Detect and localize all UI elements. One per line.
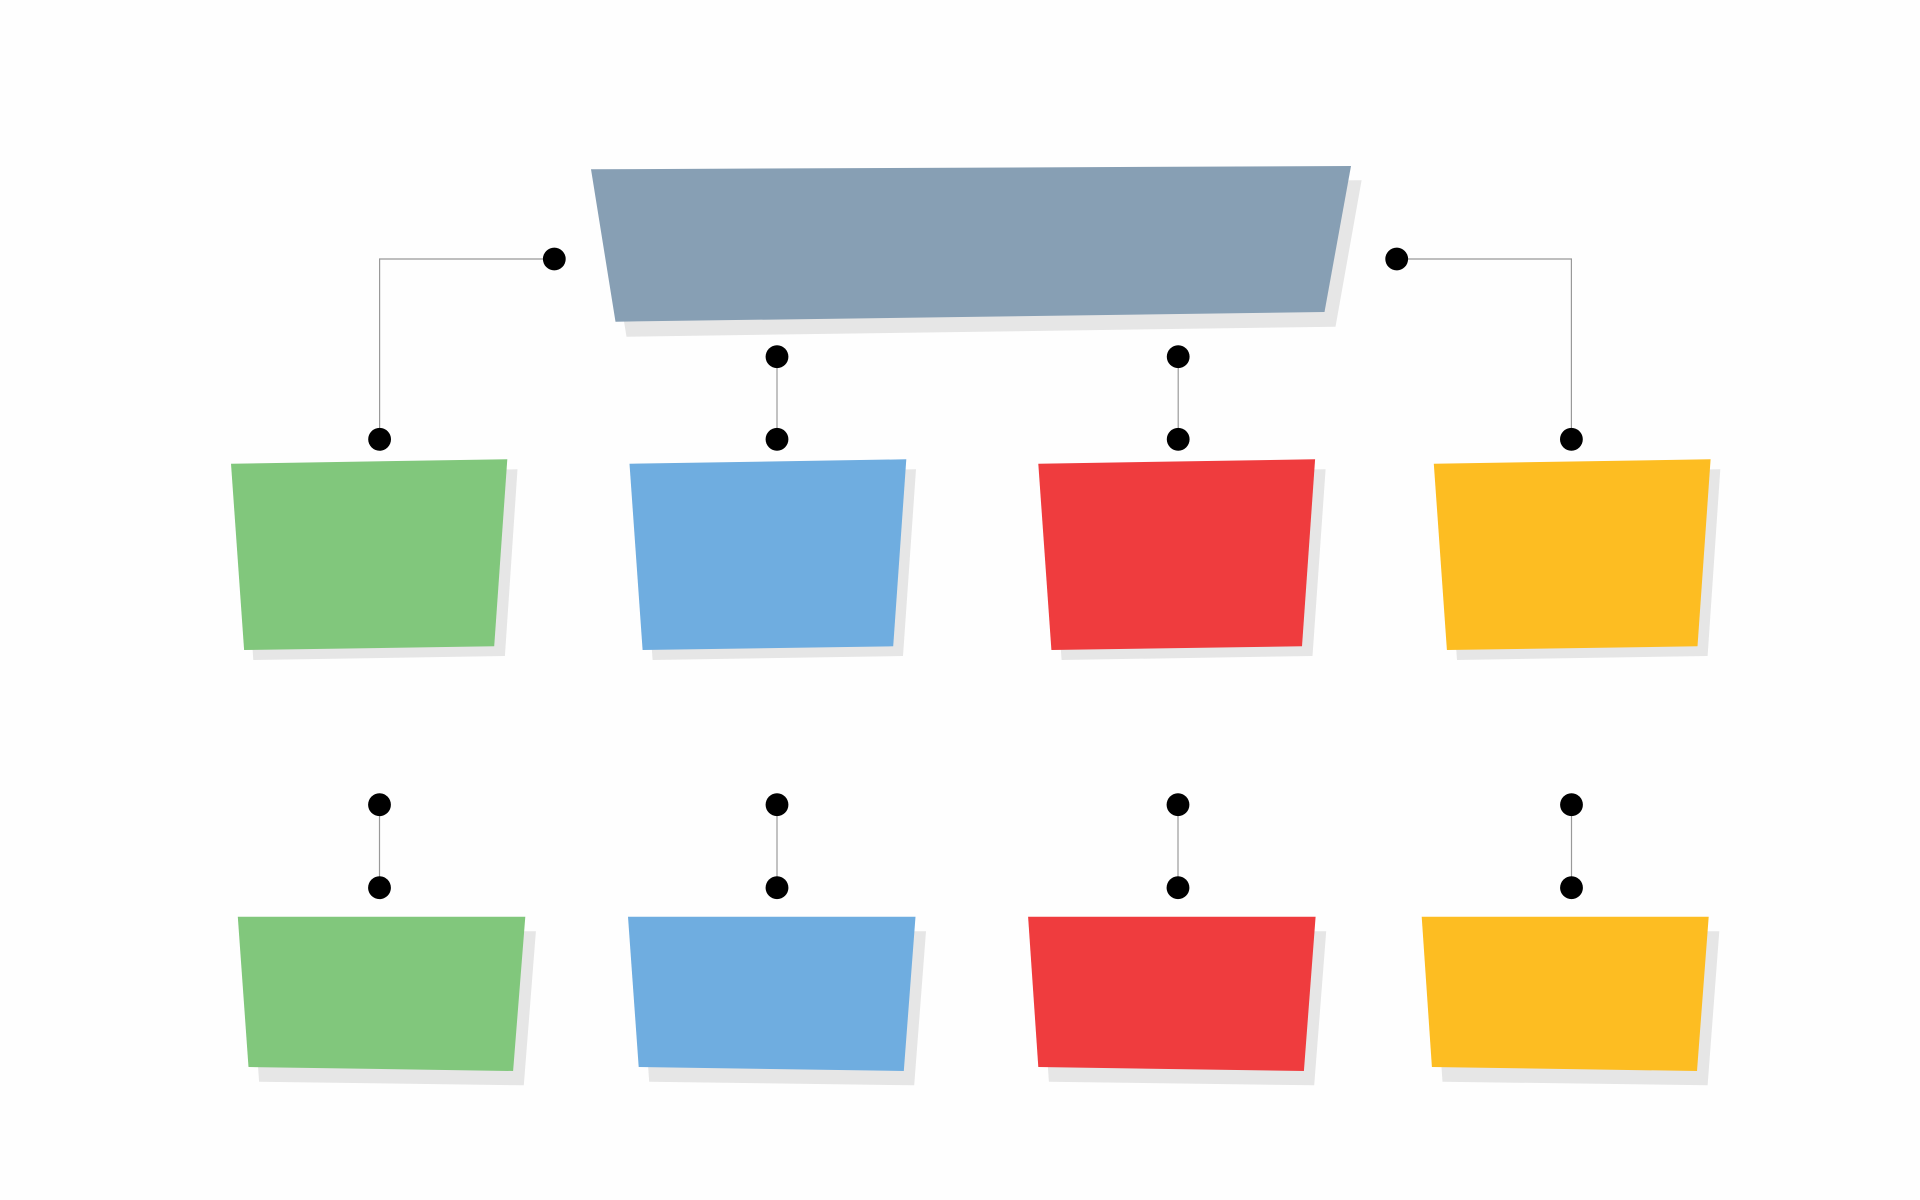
panel: third row yellow box bbox=[1422, 917, 1719, 1085]
connector: top box to red column bbox=[1167, 345, 1190, 451]
connector: top box to yellow column bbox=[1385, 248, 1583, 451]
panel: second row red box bbox=[1038, 459, 1326, 660]
connector: top box to green column bbox=[368, 248, 566, 451]
connector: red column lower bbox=[1167, 793, 1189, 899]
panel: top slate box bbox=[591, 166, 1362, 337]
panel: second row blue box bbox=[630, 459, 916, 660]
panel: third row red box bbox=[1028, 917, 1326, 1085]
connector: top box to blue column bbox=[766, 345, 788, 451]
panel: second row yellow box bbox=[1434, 459, 1720, 660]
connector: blue column lower bbox=[766, 793, 788, 899]
panel: second row green box bbox=[231, 459, 518, 660]
connector: green column lower bbox=[368, 793, 391, 899]
connector: yellow column lower bbox=[1560, 793, 1583, 899]
panel: third row blue box bbox=[628, 917, 926, 1085]
panel: third row green box bbox=[238, 917, 536, 1085]
